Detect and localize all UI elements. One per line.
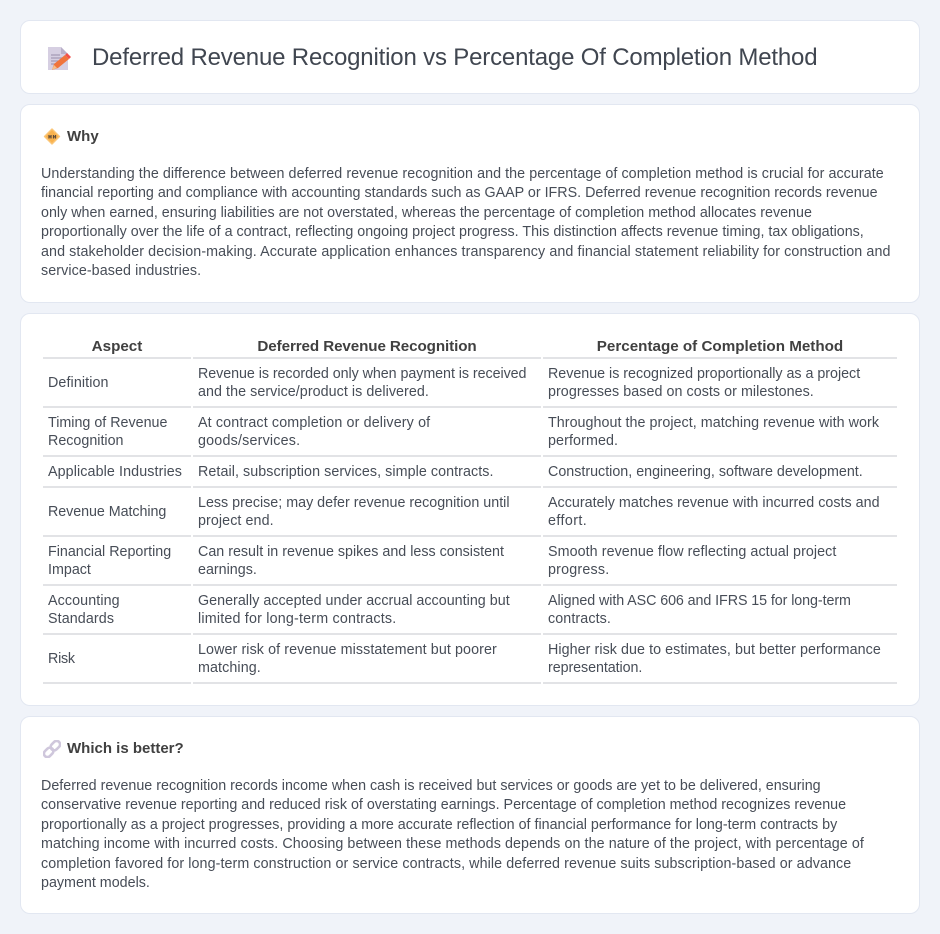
text block: which is better: matching income with incurred costs. Choosing between these methods depends on the nature of the project, with percentage of (41, 836, 864, 852)
row: risk (48, 642, 881, 676)
row: definition: Definition (48, 375, 109, 391)
panel: comparison table (20, 313, 920, 706)
text block: why: only when earned, ensuring liabilities are not overstated, whereas the percentage of completion method allocates revenue (41, 205, 812, 221)
row: risk: matching. (198, 660, 261, 676)
row: financial reporting impact (48, 544, 836, 578)
icon: document with pencil (48, 47, 71, 70)
row: risk: Higher risk due to estimates, but better performance (548, 642, 881, 658)
row: applicable industries: Construction, engineering, software development. (548, 464, 863, 480)
row: applicable industries: Retail, subscription services, simple contracts. (198, 464, 494, 480)
title: Deferred Revenue Recognition vs Percentage Of Completion Method (92, 44, 817, 71)
text block: why: and stakeholder decision-making. Accurate application enhances transparency and financial statement reliability for construction and (41, 244, 891, 260)
heading: which is better: Which is better? (67, 740, 184, 757)
row: definition: progresses based on costs or milestones. (548, 384, 814, 400)
icon: chain link (43, 740, 61, 758)
row: financial reporting impact: Impact (48, 562, 91, 578)
text block: which is better: Deferred revenue recognition records income when cash is received but services or goods are yet to be delivered, ensuring (41, 778, 821, 794)
text block: which is better: proportionally as a project progresses, providing a more accurate reflection of financial performance for long-term contracts by (41, 817, 837, 833)
row: risk: Risk (48, 651, 75, 667)
row: risk: representation. (548, 660, 642, 676)
row: accounting standards: Generally accepted under accrual accounting but (198, 593, 510, 609)
text block: which is better: payment models. (41, 875, 150, 891)
row: revenue matching: Accurately matches revenue with incurred costs and (548, 495, 880, 511)
row: revenue matching: Revenue Matching (48, 504, 166, 520)
row: applicable industries: Applicable Industries (48, 464, 182, 480)
row: definition: Revenue is recognized proportionally as a project (548, 366, 860, 382)
row: timing of revenue recognition (48, 415, 879, 449)
text block: why: service-based industries. (41, 263, 201, 279)
panel: why (20, 104, 920, 303)
icon: warning diamond (44, 128, 60, 145)
text block: why: proportionally over the life of a contract, reflecting ongoing project progress. This distinction affects revenue timing, tax obligations, (41, 224, 864, 240)
text block: which is better: completion favored for long-term construction or service contracts, while deferred revenue suits subscription-based or advance (41, 856, 851, 872)
row: risk: Lower risk of revenue misstatement but poorer (198, 642, 497, 658)
row: revenue matching: Less precise; may defer revenue recognition until (198, 495, 510, 511)
row: financial reporting impact: Can result in revenue spikes and less consistent (198, 544, 504, 560)
table header: percentage of completion method: Percentage of Completion Method (597, 338, 843, 355)
row: revenue matching: effort. (548, 513, 587, 529)
row: definition: Revenue is recorded only when payment is received (198, 366, 526, 382)
row: timing of revenue recognition: Throughout the project, matching revenue with work (548, 415, 879, 431)
row: revenue matching: project end. (198, 513, 274, 529)
row: accounting standards: Standards (48, 611, 114, 627)
text block: why (41, 166, 891, 279)
row: accounting standards: Accounting (48, 593, 120, 609)
row: accounting standards (48, 593, 851, 627)
table header: aspect: Aspect (92, 338, 142, 355)
row: accounting standards: limited for long-term contracts. (198, 611, 396, 627)
text block: which is better (41, 778, 864, 891)
row: accounting standards: contracts. (548, 611, 611, 627)
heading: why: Why (67, 128, 99, 145)
row: financial reporting impact: Financial Reporting (48, 544, 171, 560)
row: financial reporting impact: earnings. (198, 562, 257, 578)
row: financial reporting impact: progress. (548, 562, 609, 578)
header panel (20, 20, 920, 94)
text block: why: financial reporting and compliance with accounting standards such as GAAP or IFRS. Deferred revenue recognition records revenue (41, 185, 878, 201)
row: timing of revenue recognition: At contract completion or delivery of (198, 415, 430, 431)
row: accounting standards: Aligned with ASC 606 and IFRS 15 for long-term (548, 593, 851, 609)
panel: which is better (20, 716, 920, 914)
row: definition (48, 366, 860, 400)
row: timing of revenue recognition: Timing of Revenue (48, 415, 167, 431)
text block: why: Understanding the difference between deferred revenue recognition and the percentage of completion method is crucial for accurate (41, 166, 884, 182)
row: financial reporting impact: Smooth revenue flow reflecting actual project (548, 544, 836, 560)
row: timing of revenue recognition: performed. (548, 433, 618, 449)
row: timing of revenue recognition: goods/services. (198, 433, 300, 449)
row: applicable industries (48, 464, 863, 480)
row: revenue matching (48, 495, 880, 529)
text block: which is better: conservative revenue reporting and reduced risk of overstating earnings. Percentage of completion method recognizes revenue (41, 797, 846, 813)
table header: deferred revenue recognition: Deferred Revenue Recognition (257, 338, 477, 355)
row: timing of revenue recognition: Recognition (48, 433, 124, 449)
row: definition: and the service/product is delivered. (198, 384, 429, 400)
